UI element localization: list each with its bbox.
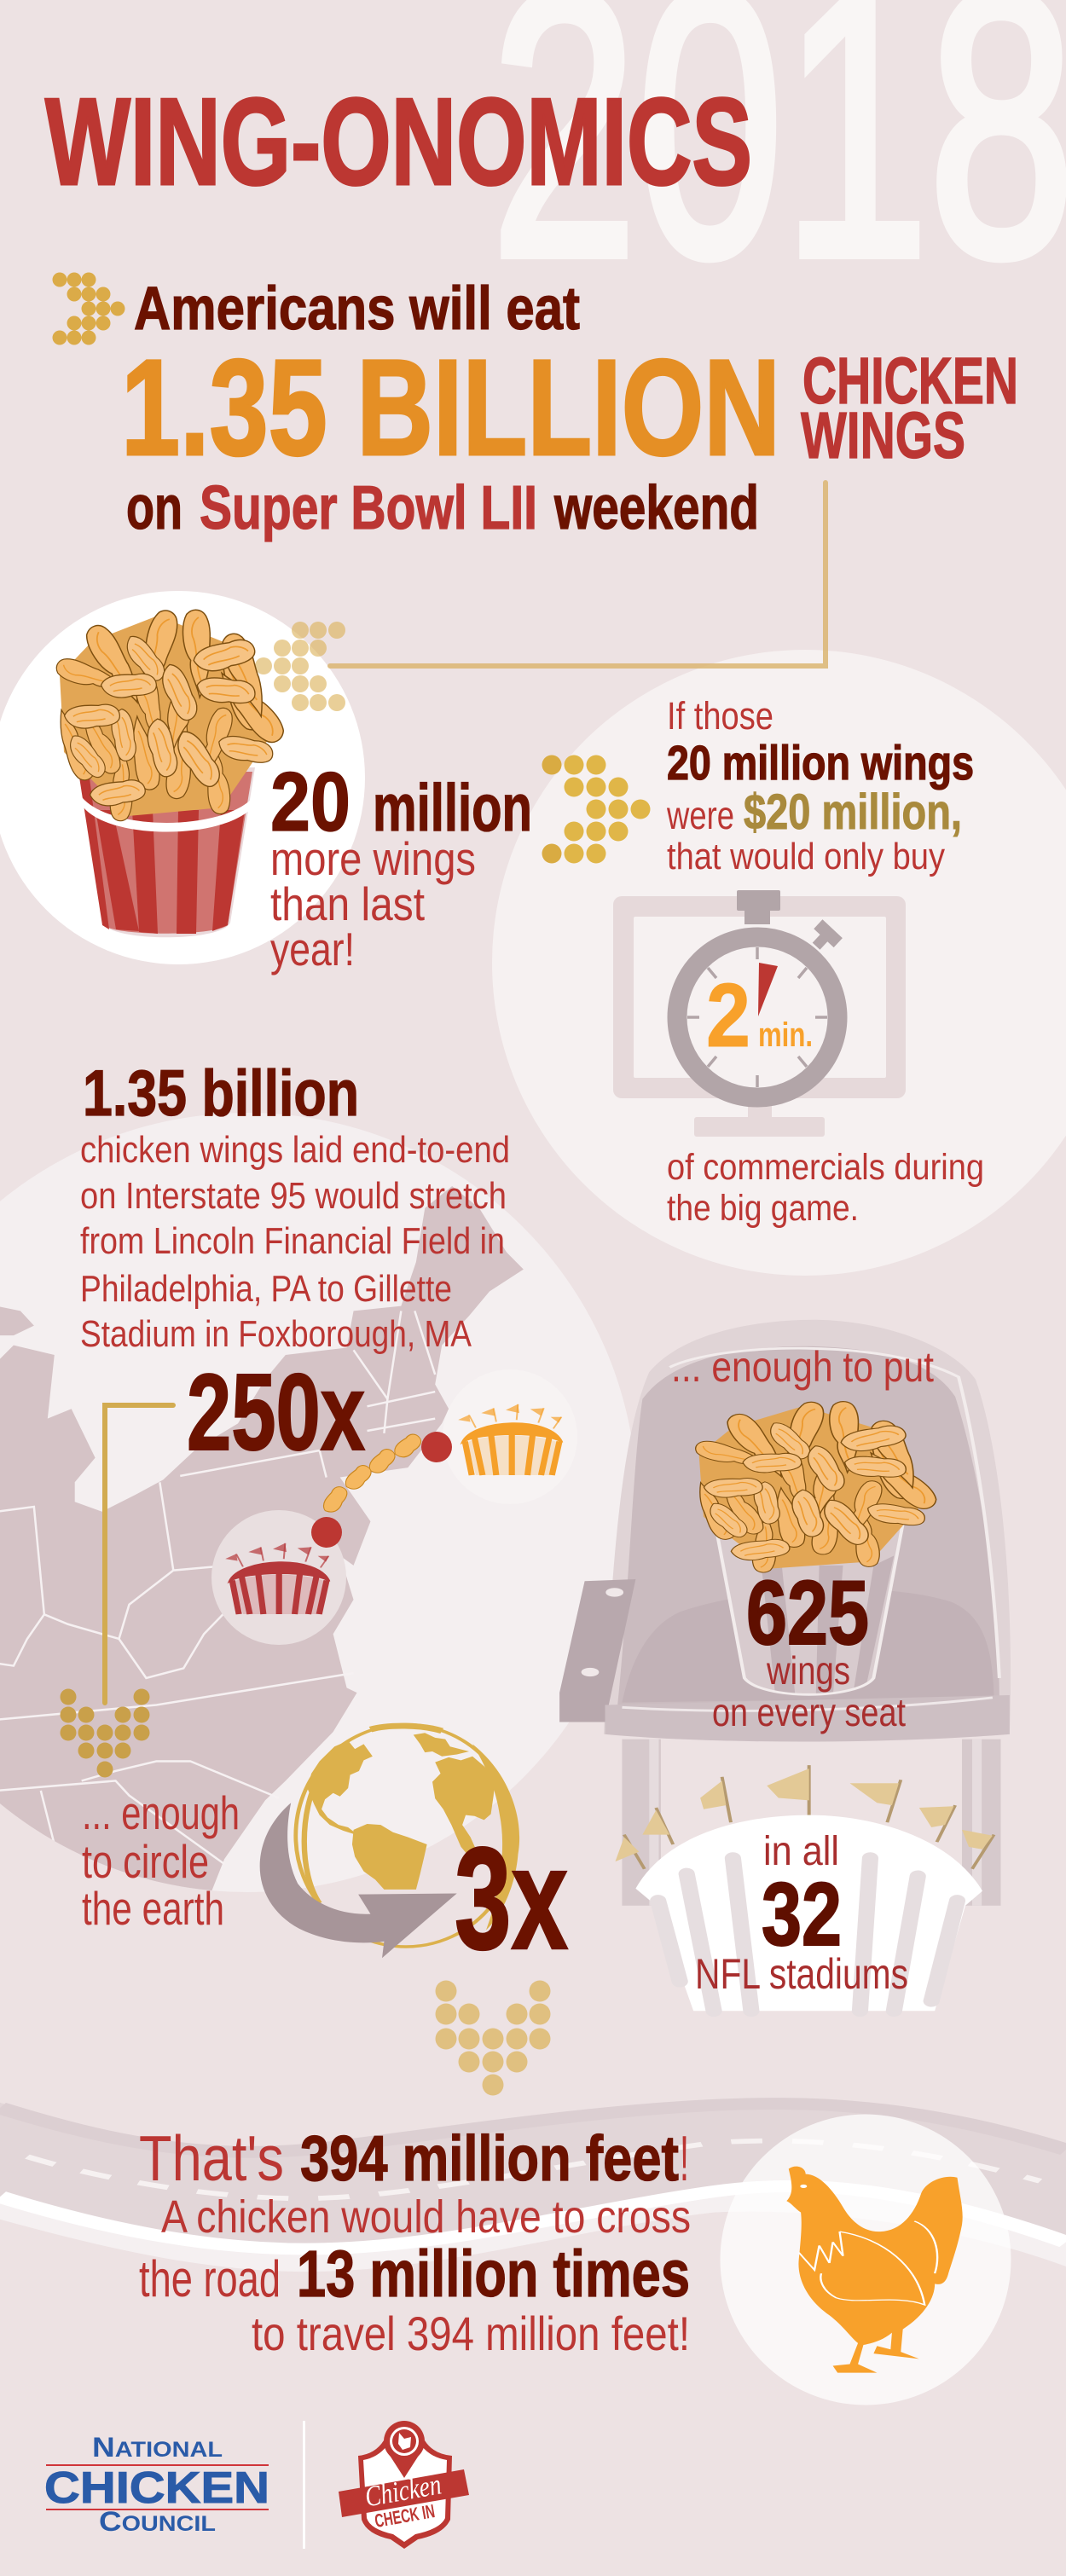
headline: on Super Bowl LII weekend: weekend: [553, 474, 759, 542]
stat: 250x: 250x: [187, 1352, 365, 1473]
headline: on Super Bowl LII weekend: Super Bowl LII: [200, 474, 537, 542]
stat: 625 wings on every seat: wings: [766, 1648, 850, 1693]
text: enough to circle the earth: [82, 1786, 240, 1935]
icon: wing trail: [320, 1431, 424, 1516]
stat: 20 million: million: [373, 770, 532, 845]
icon: gillette stadium: [443, 1369, 577, 1504]
text: 1.35 billion stat: 1.35 billion: [83, 1057, 359, 1130]
text: more wings than last year: [270, 832, 476, 975]
text: if those 20 million wings: [666, 694, 974, 877]
logo: chicken check in badge: Chicken: [362, 2469, 443, 2514]
logo: national chicken council: COUNCIL: [99, 2506, 216, 2537]
icon: seat bucket: [710, 1507, 907, 1698]
stat: 32 nfl stadiums: 32: [762, 1865, 842, 1965]
icon: dot arrow bucket: [255, 622, 345, 711]
divider: [303, 2421, 305, 2549]
icon: stadium seat with bucket: [559, 1320, 1011, 2011]
text: of commercials: the big game.: [667, 1188, 859, 1229]
stat: 32 nfl stadiums: NFL stadiums: [695, 1950, 908, 1998]
marker: foxborough: [421, 1432, 452, 1462]
headline: chicken wings: [801, 344, 1018, 472]
text: laid end to end description: from Lincoln Financial Field in: [80, 1220, 505, 1262]
text: the road 13 million times: [139, 2237, 690, 2311]
stat: 32 nfl stadiums: [695, 1829, 908, 1998]
logo: chicken check in badge: [339, 2421, 469, 2549]
icon: chicken: [786, 2167, 963, 2373]
connector line: [330, 483, 826, 666]
text: laid end to end description: on Interstate 95 would stretch: [80, 1175, 507, 1217]
logo: chicken check in badge: CHECK IN: [373, 2500, 437, 2532]
icon: tv with stopwatch: 2: [706, 965, 750, 1066]
stat: 32 nfl stadiums: in all: [763, 1829, 839, 1874]
icon: white stadium: [635, 1815, 982, 2011]
panel: chicken circle: [720, 2115, 1011, 2405]
text: the road 13 million times: the road: [139, 2250, 281, 2307]
map: eastern united states: [0, 1186, 524, 1893]
icon: seat wing pile: [690, 1399, 942, 1573]
text: that's 394 million feet: That's: [139, 2122, 284, 2194]
text: more wings than last year: than last: [270, 877, 425, 930]
headline: on Super Bowl LII weekend: [126, 474, 759, 542]
headline: Americans will eat: Americans will eat: [134, 275, 580, 343]
stat: 20 million: [270, 755, 532, 848]
text: that's 394 million feet: [139, 2122, 689, 2194]
headline: chicken wings: WINGS: [801, 399, 965, 472]
text: enough to circle the earth: to circle: [82, 1835, 209, 1888]
icon: lincoln financial stadium: [211, 1510, 346, 1645]
text: enough to circle the earth: ... enough: [82, 1786, 240, 1839]
icon: dot arrow map: [60, 1688, 150, 1777]
text: the road 13 million times: 13 million times: [297, 2237, 690, 2311]
text: if those 20 million wings: If those: [667, 694, 773, 738]
headline: on Super Bowl LII weekend: on: [126, 474, 182, 542]
text: to travel 394 million feet: to travel 394 million feet!: [252, 2307, 690, 2360]
bracket line: [105, 1405, 173, 1703]
text: enough to put: ... enough to put: [671, 1343, 934, 1391]
stat: 20 million: 20: [270, 755, 351, 848]
text: if those 20 million wings: that would only buy: [667, 836, 945, 877]
road: [0, 2098, 1066, 2272]
stat: 625 wings on every seat: 625: [746, 1561, 869, 1664]
icon: dot arrow right: [542, 755, 650, 863]
text: if those 20 million wings: were: [666, 793, 734, 837]
logo: national chicken council: NATIONAL: [92, 2432, 223, 2463]
icon: globe with arrow: [260, 1724, 519, 1958]
text: if those 20 million wings: 20 million wings: [667, 736, 974, 790]
icon: bucket of wings: [51, 607, 289, 937]
text: of commercials: [667, 1147, 984, 1229]
icon: flags: [615, 1765, 994, 1869]
stat: 625 wings on every seat: on every seat: [712, 1690, 906, 1734]
title: WING-ONOMICS: [45, 72, 752, 211]
text: enough to circle the earth: the earth: [82, 1882, 224, 1935]
stat: 625 wings on every seat: [712, 1561, 906, 1734]
panel: bucket white circle: [0, 591, 365, 964]
text: that's 394 million feet: 394 million feet: [300, 2122, 679, 2194]
text: more wings than last year: more wings: [270, 832, 476, 885]
icon: dot arrow down: [435, 1980, 551, 2096]
text: a chicken would have to cross: A chicken would have to cross: [161, 2191, 691, 2243]
logo: national chicken council: [44, 2432, 269, 2537]
text: that's 394 million feet: !: [680, 2122, 689, 2194]
icon: dot arrow header: [53, 273, 125, 344]
panel: right circle background: [492, 650, 1066, 1276]
icon: tv with stopwatch: min.: [758, 1016, 813, 1054]
text: more wings than last year: year!: [270, 923, 355, 975]
text: laid end to end description: Stadium in Foxborough, MA: [80, 1313, 472, 1355]
panel: map circle: [0, 1113, 637, 1892]
icon: wing pile: [51, 607, 289, 822]
text: laid end to end description: Philadelphia, PA to Gillette: [80, 1268, 452, 1310]
icon: tv with stopwatch: [613, 890, 906, 1137]
headline: 1.35 billion: 1.35 BILLION: [121, 331, 780, 483]
logo: national chicken council: CHICKEN: [44, 2463, 269, 2513]
text: if those 20 million wings: $20 million,: [744, 784, 962, 840]
text: of commercials: of commercials during: [667, 1147, 984, 1188]
stat: 3x: 3x: [455, 1818, 568, 1980]
marker: philadelphia: [311, 1517, 342, 1548]
text: laid end to end description: [80, 1129, 510, 1355]
text: laid end to end description: chicken wings laid end-to-end: [80, 1129, 510, 1171]
